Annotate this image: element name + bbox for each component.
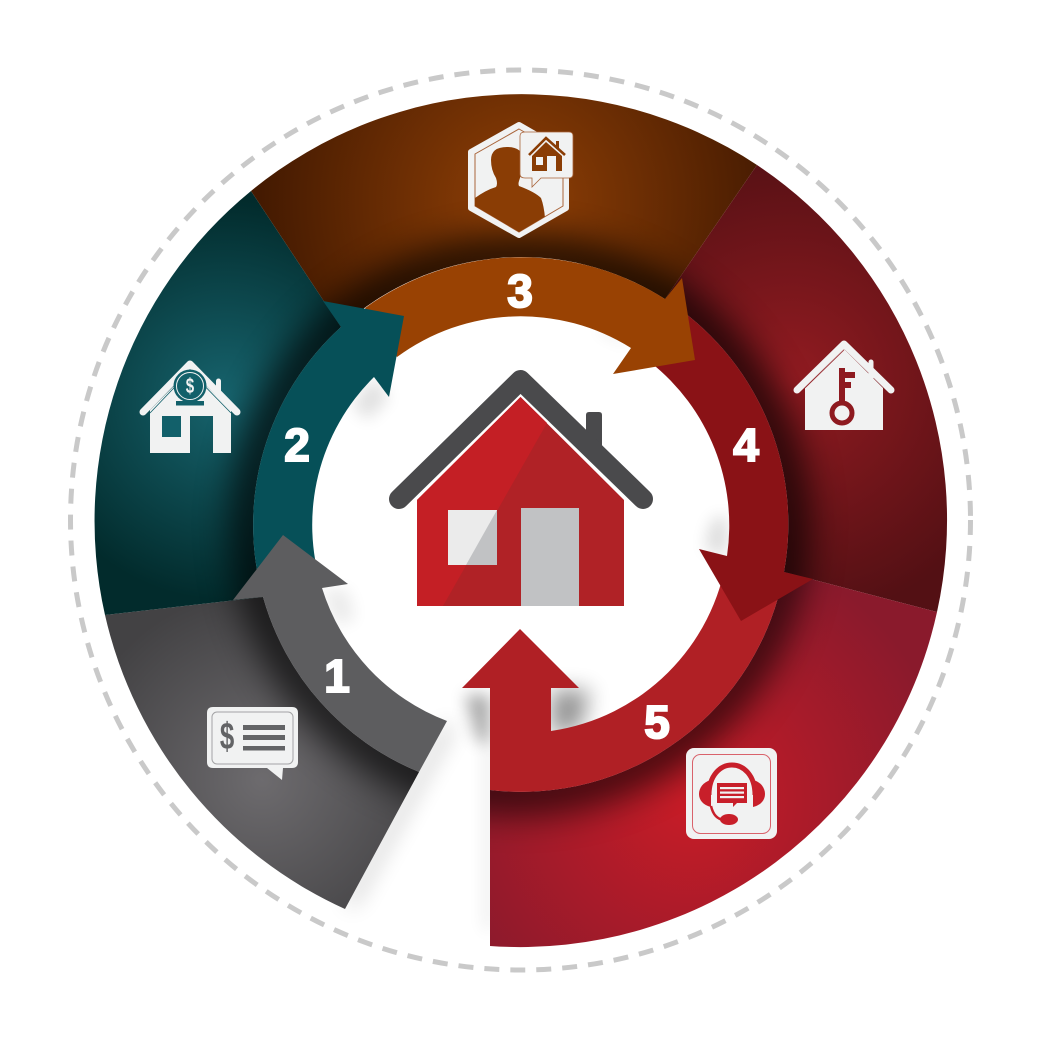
panel: step 4 segment <box>665 165 948 612</box>
number 4: 4 <box>733 419 759 471</box>
arrow: step 1 <box>233 535 447 772</box>
icon: house with dollar coin <box>143 364 237 453</box>
arrow: step 4 <box>650 299 813 621</box>
soft shadows on white <box>322 325 727 930</box>
panel: step 1 segment <box>105 597 419 909</box>
arrow: step 5 <box>462 556 784 792</box>
number 3: 3 <box>507 265 533 317</box>
icon: dollar message bubble: $ <box>220 715 234 757</box>
icon: person with house speech bubble <box>470 125 573 236</box>
arrow: step 2 <box>253 301 404 597</box>
number 5: 5 <box>644 696 670 748</box>
number 1: 1 <box>324 650 350 702</box>
cycle infographic <box>68 68 973 972</box>
icon: house with dollar coin: $ <box>186 373 194 398</box>
icon: central house <box>399 380 643 606</box>
icon: house with key <box>797 344 891 430</box>
icon: dollar message bubble <box>207 707 298 780</box>
dashed outer ring <box>70 70 970 970</box>
panel: step 2 segment <box>94 191 341 615</box>
number 2: 2 <box>284 419 310 471</box>
panel: step 5 segment <box>490 572 937 948</box>
icon: headset support <box>686 748 777 839</box>
panel: step 3 segment <box>251 94 757 327</box>
arrow: step 3 <box>365 257 695 374</box>
